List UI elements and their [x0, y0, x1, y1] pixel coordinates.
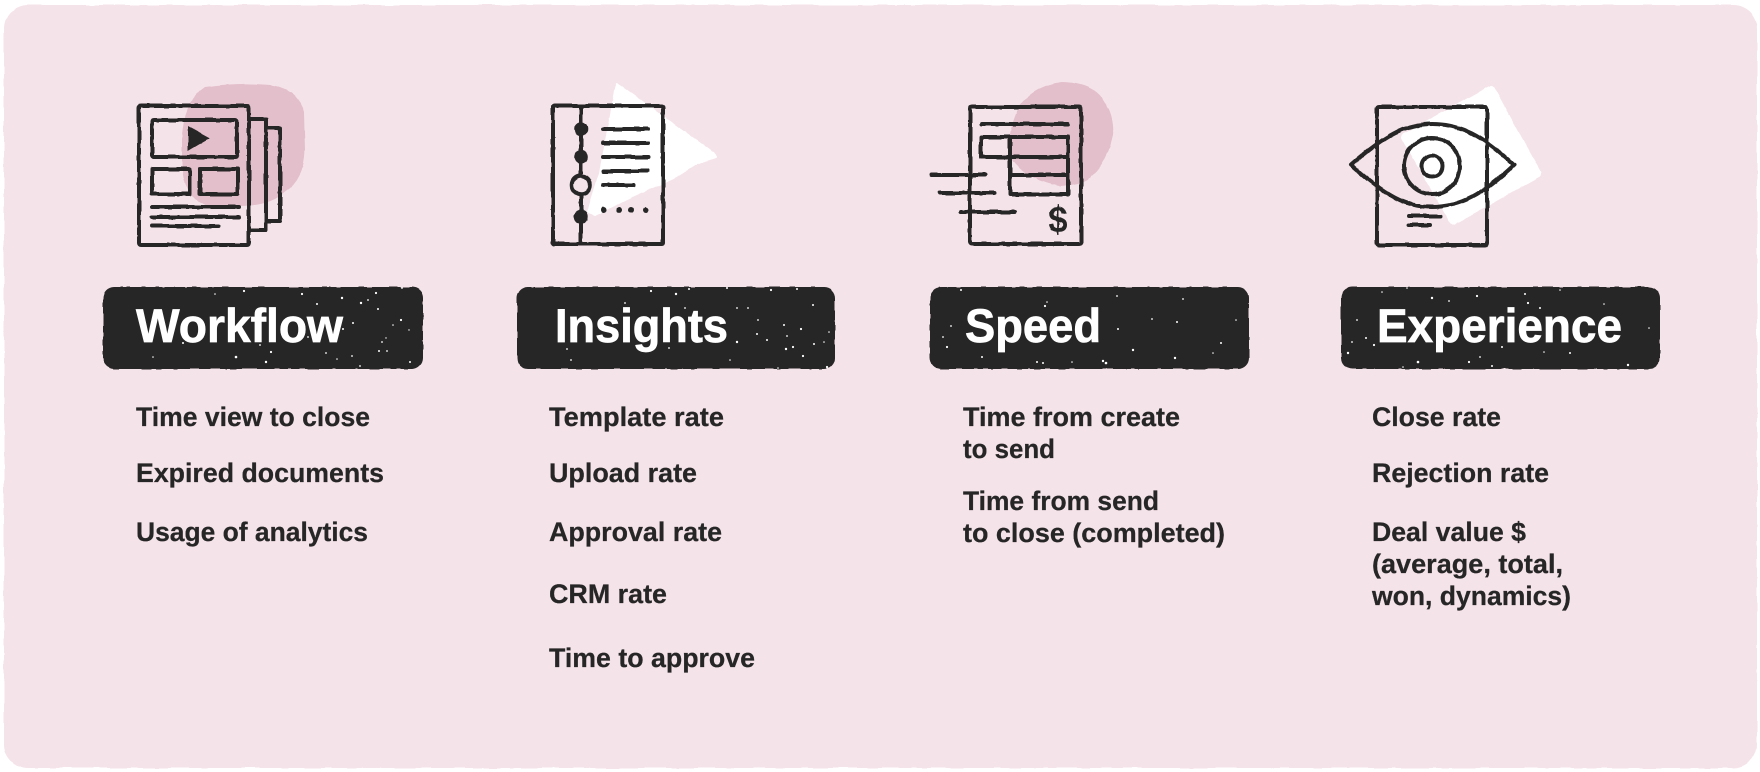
label bar: Experience	[1341, 287, 1660, 369]
pink blob	[1009, 82, 1113, 186]
bar shape	[930, 287, 1249, 369]
column: Experience	[1341, 89, 1660, 611]
timeline ring	[572, 176, 590, 194]
icon: fast invoice	[931, 82, 1113, 244]
back pages	[250, 119, 280, 230]
dollar sign: $	[1048, 199, 1068, 240]
icon: eye over document	[1351, 89, 1538, 245]
text lines	[1409, 216, 1440, 225]
iris	[1404, 138, 1460, 194]
eye outline	[1351, 124, 1514, 207]
bar shape	[517, 287, 835, 369]
metric: Expired documents	[136, 458, 384, 488]
metric: Time view to close	[136, 402, 370, 432]
column: Insights	[517, 84, 835, 673]
speckles	[1347, 287, 1650, 368]
metric: Approval rate	[549, 517, 722, 547]
timeline	[579, 106, 583, 244]
play triangle	[188, 126, 210, 151]
label bar: Speed	[930, 287, 1249, 369]
column: Speed	[930, 82, 1249, 548]
pupil	[1422, 156, 1442, 176]
metric: Usage of analytics	[136, 517, 368, 547]
metric: Time from send	[963, 486, 1159, 516]
heading: Insights	[555, 299, 728, 352]
label bar: Insights	[517, 287, 835, 369]
speckles	[566, 287, 830, 369]
metric: to close (completed)	[963, 518, 1225, 548]
metric: to send	[963, 434, 1055, 464]
speed lines	[931, 175, 1015, 212]
thumbnails	[152, 169, 238, 194]
metric: Rejection rate	[1372, 458, 1549, 488]
table	[981, 137, 1068, 194]
timeline dot	[574, 210, 588, 224]
page	[1377, 107, 1487, 245]
metric: Template rate	[549, 402, 724, 432]
bar shape	[103, 287, 423, 369]
icon: document pages with video	[139, 84, 305, 245]
column: Workflow	[103, 84, 423, 547]
page	[970, 107, 1081, 244]
timeline dot	[574, 150, 588, 164]
metric: won, dynamics)	[1371, 581, 1571, 611]
metric: Time to approve	[549, 643, 755, 673]
metric: (average, total,	[1372, 549, 1563, 579]
header line	[982, 122, 1068, 126]
text lines	[603, 129, 648, 185]
metrics list	[1371, 402, 1571, 611]
timeline dots	[574, 122, 588, 136]
icon: document timeline	[553, 84, 716, 244]
metrics list	[963, 402, 1225, 548]
heading: Experience	[1377, 299, 1622, 352]
bar shape	[1341, 287, 1660, 369]
metric: CRM rate	[549, 579, 667, 609]
front page	[139, 106, 249, 245]
label bar: Workflow	[103, 287, 423, 369]
metric: Deal value $	[1372, 517, 1526, 547]
white triangle	[588, 84, 716, 215]
metrics list	[549, 402, 755, 673]
speckles	[942, 289, 1237, 364]
heading: Workflow	[136, 299, 343, 352]
metric: Upload rate	[549, 458, 697, 488]
pink blob	[182, 84, 305, 206]
dotted line	[601, 207, 649, 213]
heading: Speed	[965, 299, 1101, 352]
speckles	[152, 287, 411, 367]
page	[553, 106, 663, 244]
text lines	[152, 207, 239, 226]
metric: Time from create	[963, 402, 1180, 432]
metric: Close rate	[1372, 402, 1501, 432]
video frame	[152, 120, 237, 157]
white rotated square	[1405, 89, 1538, 221]
metrics list	[136, 402, 384, 547]
